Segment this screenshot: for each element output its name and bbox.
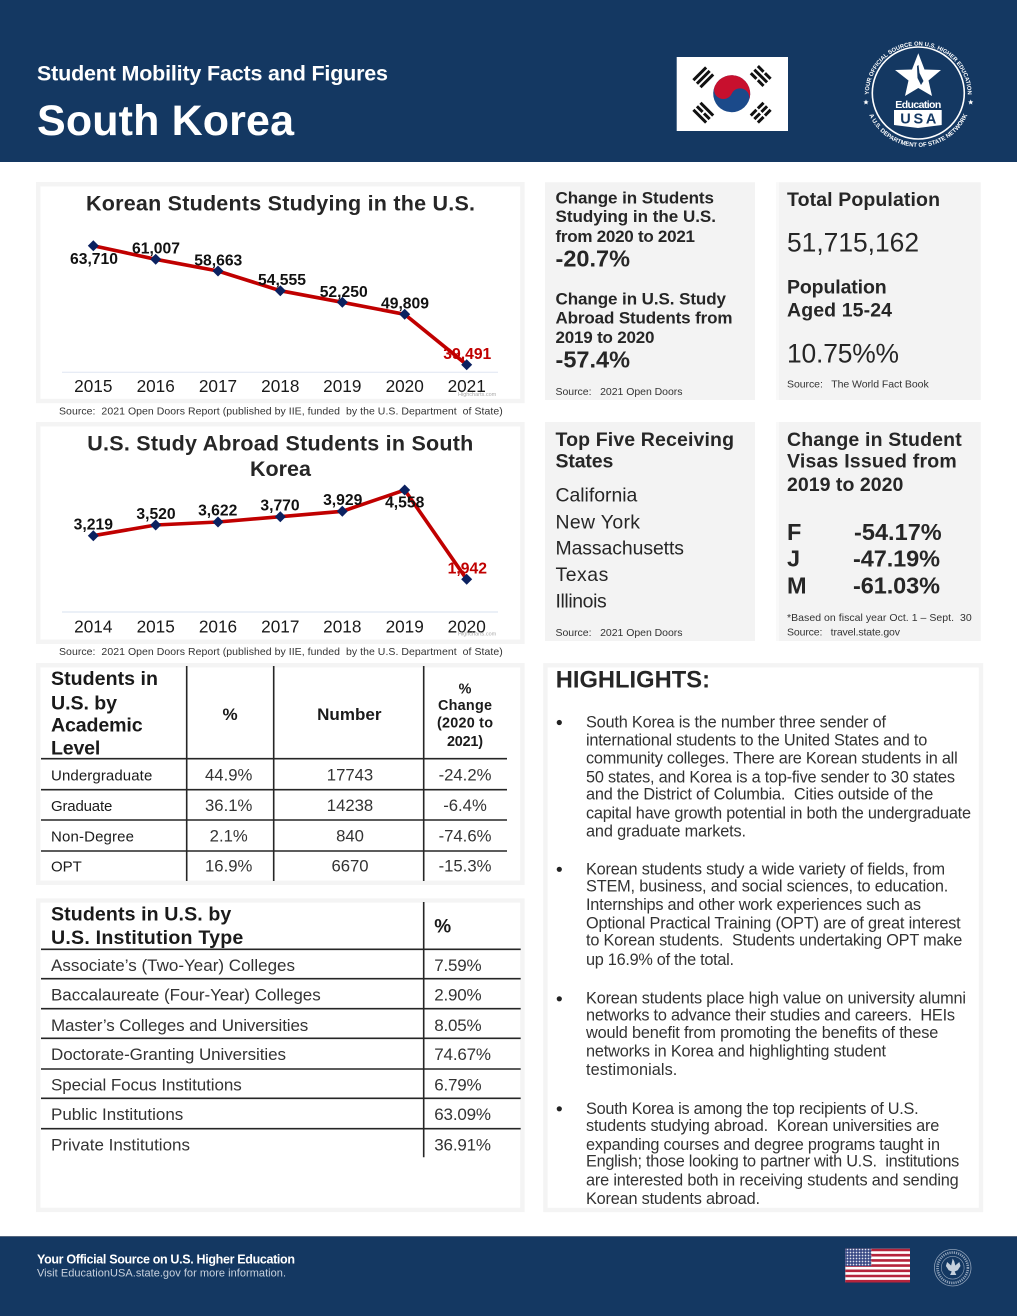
highlight 1: international students to the United States and to — [586, 731, 927, 749]
stat: population aged 15-24: Population — [787, 277, 887, 299]
heading: Top Five Receiving — [556, 429, 734, 451]
header row: (2020 to — [437, 716, 493, 732]
data labels: 3,520 — [136, 506, 176, 523]
row: private: Private Institutions — [51, 1135, 190, 1154]
data labels: 61,007 — [132, 241, 180, 258]
data labels: 3,929 — [323, 492, 363, 509]
stat: total population: 51,715,162 — [787, 228, 919, 258]
state list: Illinois — [556, 591, 607, 613]
icon: EducationUSA seal: Education — [895, 99, 941, 111]
icon: EducationUSA seal — [864, 42, 974, 147]
data labels: 3,622 — [198, 503, 238, 520]
panel: student visas — [776, 422, 981, 641]
visa change figures: -61.03% — [853, 572, 940, 598]
data labels: 4,558 — [385, 494, 425, 511]
state list: Massachusetts — [556, 537, 684, 559]
panel: top five receiving states — [545, 422, 755, 641]
highlight 3: testimonials. — [586, 1061, 677, 1079]
highlight 1: and graduate markets. — [586, 823, 746, 841]
x axis years: 2020 — [448, 616, 486, 636]
header row: U.S. Institution Type — [51, 927, 243, 949]
row: graduate: Graduate — [51, 798, 112, 815]
row: doctorate universities — [51, 1045, 491, 1064]
panel: highlights — [545, 665, 981, 1210]
data labels: 49,809 — [381, 295, 429, 312]
row: undergraduate: 17743 — [327, 766, 373, 785]
header band — [0, 0, 1017, 162]
stat: change in students studying in the U.S. — [556, 188, 716, 272]
stat: change in students studying in the U.S.: Studying in the U.S. — [556, 207, 716, 226]
highlight 2 — [557, 860, 962, 969]
row: public: Public Institutions — [51, 1105, 183, 1124]
x axis years: 2017 — [261, 616, 299, 636]
subtitle: Student Mobility Facts and Figures — [37, 62, 388, 86]
stat: change in students studying in the U.S.: from 2020 to 2021 — [556, 227, 695, 246]
highlight 2: up 16.9% of the total. — [586, 951, 734, 969]
stat: total population: Total Population — [787, 189, 940, 211]
row: baccalaureate colleges: 2.90% — [434, 985, 482, 1004]
data markers — [88, 484, 472, 585]
header row: Academic — [51, 714, 143, 736]
row: OPT: 6670 — [331, 857, 369, 876]
header row: Students in U.S. by — [51, 904, 231, 926]
row: public: 63.09% — [434, 1105, 491, 1124]
highlight 2: Optional Practical Training (OPT) are of great interest — [586, 915, 961, 933]
header row — [51, 904, 451, 949]
chart title: Korean Students Studying in the U.S. — [86, 192, 475, 216]
state list: New York — [556, 511, 640, 533]
row: doctorate universities: 74.67% — [434, 1045, 491, 1064]
highlight 4: students studying abroad. Korean universities are — [586, 1117, 939, 1135]
stat: population aged 15-24: Aged 15-24 — [787, 299, 892, 321]
highlight 2: Korean students study a wide variety of fields, from — [586, 860, 945, 878]
row: graduate: 36.1% — [205, 796, 253, 815]
row: baccalaureate colleges: Baccalaureate (Four-Year) Colleges — [51, 985, 321, 1004]
chart title — [87, 432, 473, 481]
row: private: 36.91% — [434, 1135, 491, 1154]
x axis years: 2015 — [137, 616, 175, 636]
heading — [556, 429, 734, 473]
icon: U.S. flag — [845, 1249, 910, 1282]
highlight 4: are interested both in receiving students and sending — [586, 1172, 959, 1190]
data labels: 63,710 — [70, 251, 118, 268]
stat: change in U.S. study abroad students — [556, 289, 732, 372]
x axis years: 2019 — [386, 616, 424, 636]
highlight 3: networks to advance their studies and careers. HEIs — [586, 1007, 955, 1025]
state list: Texas — [556, 564, 608, 586]
highlight 3 — [557, 989, 966, 1079]
header row: Number — [317, 705, 382, 724]
table: students by academic level — [38, 665, 522, 883]
row: associate's colleges: 7.59% — [434, 956, 482, 975]
row: special focus — [51, 1076, 482, 1095]
source note: Source: The World Fact Book — [787, 379, 929, 391]
row: OPT — [51, 857, 492, 876]
footer tagline: Your Official Source on U.S. Higher Education — [37, 1252, 295, 1266]
data labels: 3,219 — [74, 517, 113, 534]
data labels — [70, 241, 492, 363]
footnote and source: Source: travel.state.gov — [787, 627, 901, 639]
footer link: Visit EducationUSA.state.gov for more information. — [37, 1268, 286, 1280]
highlight 4 — [557, 1100, 959, 1208]
data labels: 52,250 — [320, 284, 368, 301]
row: master's colleges: 8.05% — [434, 1016, 482, 1035]
country title: South Korea — [37, 97, 295, 145]
highlight 3: would benefit from promoting the benefits of these — [585, 1024, 938, 1042]
visa change figures: M — [787, 572, 807, 598]
row: master's colleges: Master’s Colleges and Universities — [51, 1016, 308, 1035]
stat: change in U.S. study abroad students: -57.4% — [556, 346, 630, 372]
row: undergraduate: -24.2% — [439, 766, 492, 785]
heading: HIGHLIGHTS: — [556, 667, 710, 693]
visa change figures — [787, 519, 942, 598]
icon: EducationUSA seal: A U.S. DEPARTMENT OF STATE NETWORK — [869, 113, 968, 147]
visa change figures: -54.17% — [854, 519, 942, 545]
header row: Level — [51, 738, 100, 760]
chart source note: Source: 2021 Open Doors Report (published by IIE, funded by the U.S. Department of State) — [59, 646, 503, 658]
icon: EducationUSA seal: USA — [900, 112, 937, 128]
heading: States — [556, 451, 613, 473]
row: associate's colleges: Associate’s (Two-Year) Colleges — [51, 956, 295, 975]
highlight 4: English; those looking to partner with U.S. institutions — [586, 1153, 959, 1171]
row: OPT: 16.9% — [205, 857, 253, 876]
chart title: Korea — [250, 457, 312, 481]
x axis years: 2021 — [448, 376, 486, 396]
x axis years: 2020 — [386, 376, 424, 396]
header row: U.S. by — [51, 692, 117, 714]
x axis years: 2014 — [74, 616, 113, 636]
row: OPT: OPT — [51, 859, 82, 876]
highlight 2: Internships and other work experiences such as — [586, 896, 921, 914]
header row: % — [459, 681, 472, 697]
row: graduate — [51, 796, 487, 815]
data labels: 39,491 — [443, 346, 492, 363]
data labels: 3,770 — [260, 498, 300, 515]
highlight 1: community colleges. There are Korean students in all — [586, 750, 958, 768]
row: non-degree: Non-Degree — [51, 829, 134, 846]
icon: EducationUSA seal: YOUR OFFICIAL SOURCE ON U.S. HIGHER EDUCATION — [864, 42, 972, 94]
row: special focus: Special Focus Institutions — [51, 1076, 242, 1095]
row: non-degree: -74.6% — [439, 827, 492, 846]
row: special focus: 6.79% — [434, 1076, 482, 1095]
row: OPT: -15.3% — [439, 857, 492, 876]
x axis years: 2018 — [261, 376, 299, 396]
state list — [556, 485, 684, 613]
highlight 4: expanding courses and degree programs taught in — [586, 1136, 940, 1154]
chart title: U.S. Study Abroad Students in South — [87, 432, 473, 456]
state list: California — [556, 485, 638, 507]
row: private — [51, 1135, 491, 1154]
highlight 4: South Korea is among the top recipients of U.S. — [586, 1100, 919, 1118]
heading: 2019 to 2020 — [787, 474, 903, 496]
line series — [93, 246, 467, 365]
footnote and source: *Based on fiscal year Oct. 1 – Sept. 30 — [787, 612, 972, 624]
heading: Visas Issued from — [787, 451, 957, 473]
row: master's colleges — [51, 1016, 482, 1035]
header row — [51, 668, 493, 760]
row: non-degree: 2.1% — [210, 827, 248, 846]
row: baccalaureate colleges — [51, 985, 482, 1004]
row: graduate: -6.4% — [443, 796, 487, 815]
panel: Korean students line chart: Highcharts.com — [458, 392, 497, 398]
highlight 1: South Korea is the number three sender of — [586, 714, 886, 732]
x axis years: 2016 — [137, 376, 175, 396]
header row: % — [434, 916, 451, 937]
panel: study abroad line chart: Highcharts.com — [458, 632, 497, 638]
source note: Source: 2021 Open Doors — [556, 627, 682, 639]
icon: South Korean flag — [677, 57, 788, 131]
stat: total population — [787, 189, 940, 258]
highlight 3: Korean students place high value on university alumni — [586, 989, 966, 1007]
heading: Change in Student — [787, 429, 962, 451]
panel: study abroad line chart — [38, 424, 522, 642]
x axis years: 2015 — [74, 376, 112, 396]
source note: Source: 2021 Open Doors — [556, 386, 682, 398]
x axis years: 2019 — [323, 376, 361, 396]
highlight 2: STEM, business, and social sciences, to education. — [586, 878, 948, 896]
stat: population aged 15-24 — [787, 277, 899, 369]
row: non-degree — [51, 827, 492, 846]
row: undergraduate: 44.9% — [205, 766, 253, 785]
icon: Department of State seal — [934, 1249, 971, 1286]
stat: change in U.S. study abroad students: 2019 to 2020 — [556, 328, 654, 347]
data labels: 54,555 — [258, 272, 306, 289]
row: graduate: 14238 — [327, 796, 373, 815]
stat: change in students studying in the U.S.: -20.7% — [556, 246, 630, 272]
row: doctorate universities: Doctorate-Granting Universities — [51, 1045, 286, 1064]
row: public — [51, 1105, 491, 1124]
highlight 1: 50 states, and Korea is a top-five sender to 30 states — [586, 768, 955, 786]
visa change figures: F — [787, 519, 801, 545]
highlight 3: networks in Korea and highlighting student — [586, 1043, 886, 1061]
stat: change in U.S. study abroad students: Change in U.S. Study — [556, 289, 727, 308]
header row: Change — [438, 698, 492, 714]
header row: Students in — [51, 668, 158, 690]
data labels: 1,942 — [448, 560, 487, 577]
data markers — [88, 240, 472, 370]
line series — [93, 490, 467, 579]
highlight 1: and the District of Columbia. Cities outside of the — [586, 785, 933, 803]
visa change figures: -47.19% — [853, 546, 940, 572]
data labels — [74, 492, 487, 577]
data labels: 58,663 — [194, 252, 243, 269]
highlight 2: to Korean students. Students undertaking OPT make — [586, 932, 962, 950]
stat: change in students studying in the U.S.: Change in Students — [556, 188, 714, 207]
stat: change in U.S. study abroad students: Abroad Students from — [556, 308, 732, 327]
highlight 4: Korean students abroad. — [586, 1190, 760, 1208]
highlight 1 — [557, 714, 971, 841]
panel: population — [776, 182, 981, 400]
chart source note: Source: 2021 Open Doors Report (published by IIE, funded by the U.S. Department of State) — [59, 405, 503, 417]
heading — [787, 429, 962, 496]
footnote and source — [787, 612, 972, 639]
row: associate's colleges — [51, 956, 482, 975]
row: undergraduate: Undergraduate — [51, 768, 152, 785]
x axis years — [74, 616, 486, 636]
table: students by institution type — [38, 900, 522, 1210]
row: undergraduate — [51, 766, 492, 785]
header row: 2021) — [447, 734, 483, 750]
x axis years: 2017 — [199, 376, 237, 396]
visa change figures: J — [787, 546, 800, 572]
row: non-degree: 840 — [336, 827, 364, 846]
x axis years — [74, 376, 486, 396]
x axis years: 2018 — [323, 616, 361, 636]
highlight 1: capital have growth potential in both the undergraduate — [586, 804, 971, 822]
stat: population aged 15-24: 10.75%% — [787, 339, 899, 369]
x axis years: 2016 — [199, 616, 237, 636]
header row: % — [222, 705, 238, 724]
panel: Korean students line chart — [38, 184, 522, 401]
footer band — [0, 1236, 1017, 1316]
panel: change in students — [545, 182, 755, 400]
